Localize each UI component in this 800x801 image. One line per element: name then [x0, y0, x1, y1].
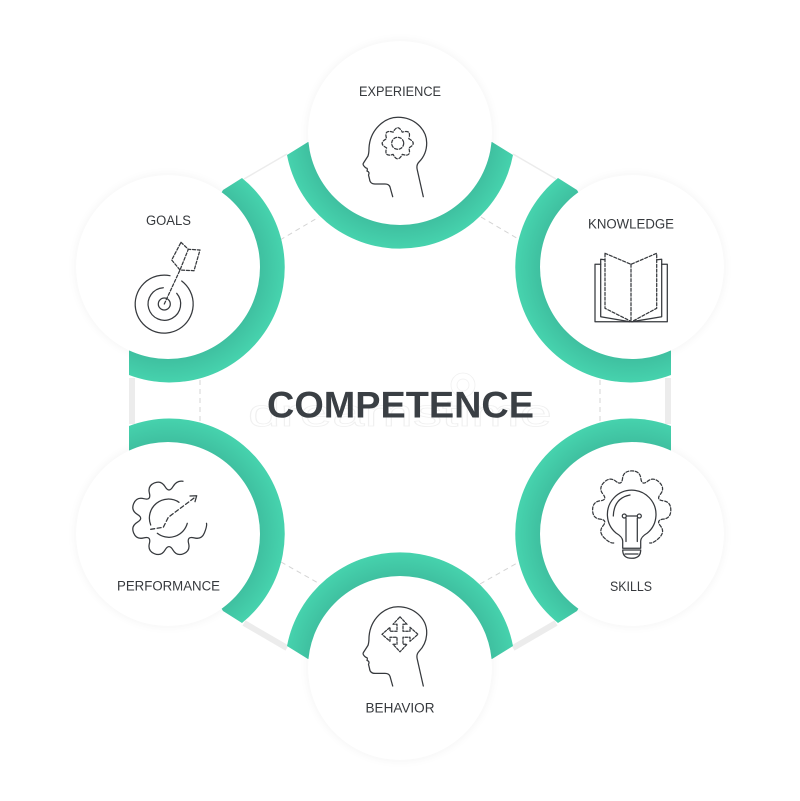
- label: performance: PERFORMANCE: [117, 579, 220, 594]
- label: goals: GOALS: [146, 213, 191, 228]
- icon: target with dart: [135, 242, 200, 333]
- green arc: goals: [129, 178, 285, 382]
- icon: head with gear: [363, 117, 427, 197]
- green arc: performance: [129, 419, 285, 623]
- label: experience: EXPERIENCE: [359, 84, 441, 99]
- green arc: knowledge: [515, 178, 671, 382]
- green arc: behavior: [287, 552, 513, 659]
- hexagon connector bands: [132, 154, 668, 648]
- inner dashed hexagon: [200, 217, 600, 584]
- title: COMPETENCE: [267, 384, 534, 425]
- icon: head with arrows: [363, 607, 427, 686]
- circle shadows: [76, 41, 724, 760]
- arrows: [382, 617, 418, 652]
- gear: [382, 128, 413, 159]
- icon: gear with growth arrow: [133, 481, 207, 555]
- green arc: experience: [287, 142, 513, 249]
- white circles: [76, 41, 724, 760]
- label: knowledge: KNOWLEDGE: [588, 216, 674, 231]
- watermark: dreamstime: [248, 393, 552, 435]
- icon: gear with lightbulb: [593, 471, 671, 558]
- label: behavior: BEHAVIOR: [366, 701, 435, 716]
- green arc: skills: [515, 419, 671, 623]
- label: skills: SKILLS: [610, 579, 652, 594]
- watermark: [248, 373, 552, 435]
- icon: open book: [595, 253, 667, 322]
